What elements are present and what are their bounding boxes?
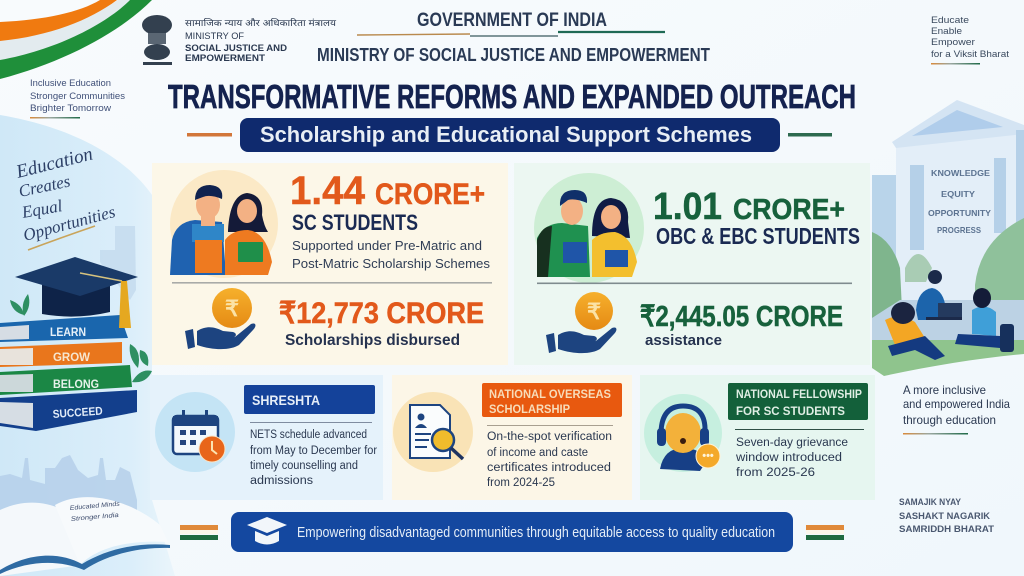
description: Post-Matric Scholarship Schemes [292, 256, 490, 271]
facade [872, 128, 1024, 345]
handwritten motto [13, 144, 118, 250]
ministry logotype: SOCIAL JUSTICE AND [185, 43, 287, 54]
statistic: 1.01 crore: CRORE+ [733, 194, 845, 226]
statistic: 1.44 crore: 1.44 [290, 169, 366, 213]
icon: document with magnifier [393, 392, 473, 472]
walkway [872, 300, 1024, 345]
panel: National Overseas Scholarship [392, 375, 632, 500]
pediment [892, 100, 1024, 148]
heading badge: Shreshta [244, 385, 375, 414]
right caption [903, 383, 1010, 434]
building words [928, 168, 991, 235]
panel: National Fellowship for SC Students [640, 375, 875, 500]
description [735, 437, 848, 479]
student: centre with laptop [916, 270, 962, 320]
heading badge: National Overseas Scholarship [482, 383, 622, 417]
description: Seven-day grievance [736, 437, 848, 449]
description [292, 238, 490, 271]
icon: SC students [170, 170, 278, 278]
statistic: 2,445.05 crore: ₹2,445.05 CRORE [640, 301, 843, 333]
faint skyline behind cap [100, 226, 136, 300]
icon: rupee coin in hand [185, 288, 255, 349]
grass [872, 340, 1024, 376]
handwritten motto: Creates [17, 171, 72, 201]
description: from 2025-26 [736, 467, 815, 479]
government heading: GOVERNMENT OF INDIA [417, 10, 607, 31]
icon: rupee coin in hand: ₹ [587, 299, 601, 324]
statistic: 1.01 crore [653, 186, 845, 228]
heading badge: National Overseas Scholarship: NATIONAL OVERSEAS [489, 389, 611, 401]
left tagline: Inclusive Education [30, 78, 111, 89]
ministry logotype: EMPOWERMENT [185, 53, 265, 64]
trees [872, 218, 1024, 318]
heading badge: Shreshta: SHRESHTA [252, 392, 320, 408]
panel: Shreshta [150, 375, 383, 500]
heading badge: National Overseas Scholarship: SCHOLARSHIP [489, 404, 570, 416]
panel: SC students [152, 163, 508, 365]
book: belong [0, 365, 132, 395]
building words: OPPORTUNITY [928, 208, 991, 218]
panel: OBC and EBC students [514, 163, 870, 365]
right top tagline [931, 15, 1009, 64]
icon: open book: Stronger India [71, 512, 119, 523]
right caption: and empowered India [903, 397, 1010, 411]
panel: left decorative background [0, 115, 175, 576]
book: succeed [0, 390, 137, 431]
icon: OBC EBC students [534, 173, 644, 283]
building words: EQUITY [941, 189, 975, 199]
description: from 2024-25 [487, 477, 555, 489]
building words: PROGRESS [937, 225, 981, 235]
right top tagline: Educate [931, 15, 969, 26]
statistic: 1.44 crore: CRORE+ [375, 178, 485, 211]
subtitle banner [187, 118, 832, 152]
icon: open book [0, 497, 170, 576]
label: OBC and EBC students: OBC & EBC STUDENTS [656, 223, 860, 249]
statistic: 1.01 crore: 1.01 [653, 186, 722, 228]
government heading: MINISTRY OF SOCIAL JUSTICE AND EMPOWERMENT [317, 44, 711, 65]
bottom right motto: SASHAKT NAGARIK [899, 511, 990, 522]
ministry logotype: MINISTRY OF [185, 31, 244, 41]
right top tagline: for a Viksit Bharat [931, 49, 1009, 60]
left tagline: Stronger Communities [30, 91, 125, 102]
student: seated with orange top [885, 302, 945, 360]
description: admissions [250, 475, 313, 487]
heading badge: National Fellowship: FOR SC STUDENTS [736, 406, 845, 418]
left tagline: Brighter Tomorrow [30, 103, 111, 114]
ministry logotype: सामाजिक न्याय और अधिकारिता मंत्रालय [185, 17, 337, 28]
icon: open book: Educated Minds [70, 501, 121, 512]
tricolour mark right [806, 525, 844, 540]
book: belong: BELONG [53, 379, 99, 391]
icon: national emblem [142, 15, 172, 65]
statistic: 1.44 crore [290, 169, 485, 213]
description: of income and caste [487, 447, 588, 459]
icon: support agent with headset [644, 394, 722, 472]
icon: calendar with clock [155, 392, 235, 472]
right caption: A more inclusive [903, 383, 986, 397]
student: seated with blue top [955, 288, 1014, 352]
book: learn [0, 315, 128, 342]
label: scholarships disbursed: Scholarships disbursed [285, 332, 460, 349]
heading badge: National Fellowship [728, 383, 868, 420]
subtitle banner: Scholarship and Educational Support Schemes [260, 122, 752, 147]
icon: rupee coin in hand: ₹ [225, 296, 239, 321]
icon: rupee coin in hand [546, 292, 616, 353]
icon: support agent with headset: ••• [702, 450, 714, 462]
book: learn: LEARN [50, 327, 86, 339]
handwritten motto: Opportunities [21, 202, 118, 245]
side wing [872, 175, 900, 275]
description: from May to December for [250, 445, 377, 457]
graduation cap [15, 257, 138, 328]
illustration: university building and students [872, 100, 1024, 376]
footer banner [180, 512, 844, 552]
handwritten motto: Education [13, 144, 95, 183]
left tagline [30, 78, 125, 118]
description: On-the-spot verification [487, 431, 612, 443]
leaves [10, 294, 152, 382]
right top tagline: Empower [931, 37, 975, 48]
icon: stack of books with graduation cap [0, 257, 152, 431]
book: grow: GROW [53, 352, 90, 364]
description [250, 429, 377, 487]
handwritten motto: Equal [19, 196, 64, 222]
label: SC students: SC STUDENTS [292, 210, 418, 235]
description: Supported under Pre-Matric and [292, 238, 482, 253]
bottom right motto [899, 497, 994, 535]
statistic: 12,773 crore: ₹12,773 CRORE [279, 297, 484, 330]
description [487, 431, 612, 489]
description: certificates introduced [487, 462, 611, 474]
flag swoosh [0, 0, 152, 79]
building words: KNOWLEDGE [931, 168, 990, 178]
footer message: Empowering disadvantaged communities through equitable access to quality education [297, 525, 775, 541]
government heading [317, 10, 711, 65]
bottom right motto: SAMRIDDH BHARAT [899, 524, 994, 535]
description: timely counselling and [250, 460, 358, 472]
skyline illustration [0, 455, 137, 510]
description: window introduced [735, 452, 842, 464]
heading badge: National Fellowship: NATIONAL FELLOWSHIP [736, 389, 862, 401]
book: succeed: SUCCEED [52, 406, 103, 421]
bottom right motto: SAMAJIK NYAY [899, 497, 962, 508]
book: grow [0, 342, 122, 367]
right top tagline: Enable [931, 26, 962, 37]
ministry logotype [185, 17, 337, 64]
right caption: through education [903, 413, 996, 427]
description: NETS schedule advanced [250, 429, 367, 441]
icon: graduation cap [247, 517, 287, 544]
label: assistance: assistance [645, 332, 722, 349]
tricolour mark left [180, 525, 218, 540]
